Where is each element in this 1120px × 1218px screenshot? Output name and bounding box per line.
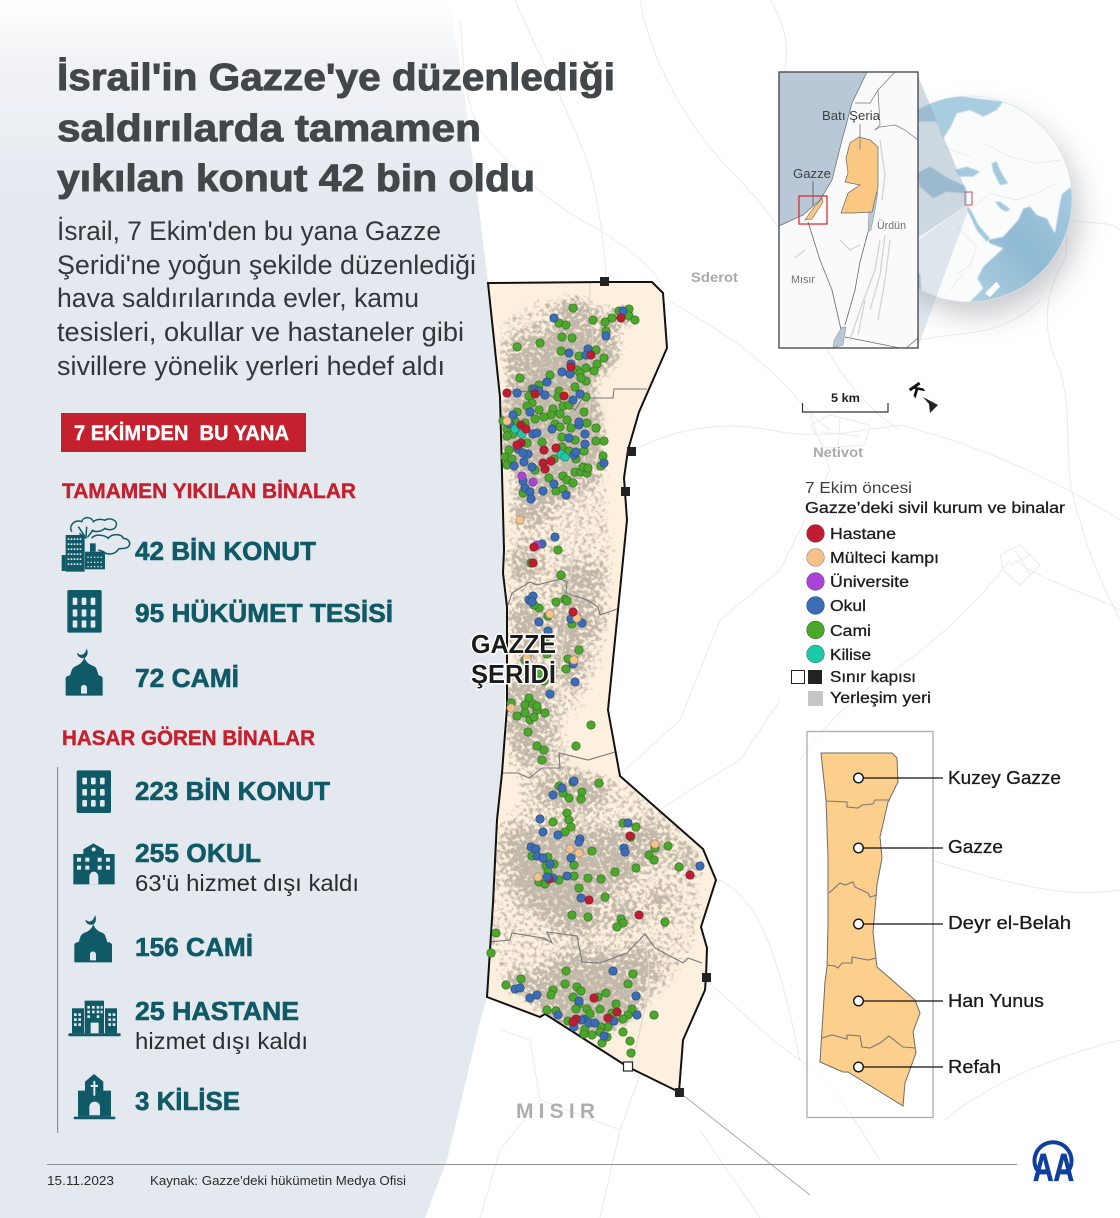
legend item: hospital: Hastane xyxy=(830,526,896,543)
heading: destroyed buildings: TAMAMEN YIKILAN BİNALAR xyxy=(62,480,356,503)
icon: school xyxy=(73,843,115,884)
stat: damaged mosques: 156 CAMİ xyxy=(135,932,253,962)
inset locator map: Gazze xyxy=(793,166,831,181)
footer source: Kaynak: Gazze'deki hükümetin Medya Ofisi xyxy=(150,1174,406,1188)
legend: Gazze’deki sivil kurum ve binalar xyxy=(805,500,1066,517)
region marker: Refah: Refah xyxy=(948,1057,1001,1077)
region marker: Gazze: Gazze xyxy=(948,837,1003,857)
stat: damaged hospitals: hizmet dışı kaldı xyxy=(135,1028,308,1054)
stat: damaged schools: 255 OKUL xyxy=(135,838,261,868)
stat: government buildings: 95 HÜKÜMET TESİSİ xyxy=(135,598,393,628)
inset locator map: Mısır xyxy=(791,274,815,286)
dots: hospitals xyxy=(503,314,694,1026)
map label: Misir: MISIR xyxy=(516,1100,595,1123)
footer date: 15.11.2023 xyxy=(47,1174,114,1188)
icon: mosque xyxy=(66,648,103,696)
stat: damaged housing: 223 BİN KONUT xyxy=(135,776,330,806)
map label: Gaza Strip: GAZZE xyxy=(471,629,556,659)
scale bar: 5 km xyxy=(831,391,860,405)
dot: extra school on top xyxy=(543,873,551,881)
legend xyxy=(792,480,1066,707)
legend item: church: Kilise xyxy=(830,647,871,664)
intro paragraph: sivillere yönelik yerleri hedef aldı xyxy=(57,351,445,381)
stat: mosques destroyed: 72 CAMİ xyxy=(135,663,239,693)
legend item: mosque xyxy=(807,621,871,640)
region marker: Refah xyxy=(854,1057,1001,1077)
legend item: border crossing: Sınır kapısı xyxy=(830,669,916,686)
map label: Netivot: Netivot xyxy=(813,444,863,460)
legend item: university xyxy=(807,573,909,591)
date banner xyxy=(61,413,306,452)
legend item: church xyxy=(807,645,871,664)
intro paragraph: hava saldırılarında evler, kamu xyxy=(57,283,419,313)
title: yıkılan konut 42 bin oldu xyxy=(57,158,535,200)
icon: damaged mosque xyxy=(74,915,112,962)
map: Gaza Strip territory xyxy=(470,282,716,1092)
intro paragraph xyxy=(57,215,476,381)
governorates locator map xyxy=(807,732,1071,1118)
icon: government building xyxy=(67,590,102,633)
north arrow xyxy=(905,379,938,413)
intro paragraph: Şeridi'ne yoğun şekilde düzenlediği xyxy=(57,250,476,280)
legend item: refugee camp: Mülteci kampı xyxy=(830,550,939,567)
dots: churches xyxy=(511,425,569,461)
title: saldırılarda tamamen xyxy=(57,108,481,150)
background street map xyxy=(460,0,1120,1218)
locator box on globe xyxy=(965,192,972,205)
dots: schools xyxy=(506,307,704,1040)
intro paragraph: İsrail, 7 Ekim'den bu yana Gazze xyxy=(57,215,441,246)
stat: damaged schools xyxy=(135,838,359,896)
legend item: settlement: Yerleşim yeri xyxy=(830,690,931,707)
legend item: school xyxy=(807,597,866,615)
icon: destroyed housing xyxy=(62,518,130,572)
legend item: hospital xyxy=(807,525,896,543)
legend item: school: Okul xyxy=(830,598,866,615)
map label: Sderot: Sderot xyxy=(691,269,738,285)
inset locator map: Ürdün xyxy=(877,220,906,232)
left panel background xyxy=(0,0,507,1218)
legend: 7 Ekim öncesi xyxy=(805,480,912,497)
icon: hospital xyxy=(68,1001,121,1036)
inset locator map: Batı Şeria xyxy=(822,108,881,123)
legend item: mosque: Cami xyxy=(830,623,871,640)
vertical rule xyxy=(57,767,58,1133)
title xyxy=(57,57,615,200)
region marker: Kuzey Gazze: Kuzey Gazze xyxy=(948,768,1061,788)
stat: damaged churches: 3 KİLİSE xyxy=(135,1086,240,1116)
dots: universities xyxy=(518,472,541,549)
logo: Anadolu Agency: AA xyxy=(1033,1147,1074,1190)
legend item: university: Üniversite xyxy=(830,573,909,591)
logo: Anadolu Agency xyxy=(1033,1142,1074,1190)
region marker: Deyr el-Belah: Deyr el-Belah xyxy=(948,913,1071,933)
north arrow: K xyxy=(905,379,928,401)
region marker: Kuzey Gazze xyxy=(854,768,1061,788)
region marker: Han Yunus: Han Yunus xyxy=(948,991,1044,1011)
icon: church xyxy=(74,1074,115,1119)
icon: apartment xyxy=(77,770,111,813)
heading: damaged buildings: HASAR GÖREN BİNALAR xyxy=(62,727,315,750)
settlements xyxy=(490,292,707,1038)
date banner: 7 EKİM'DEN BU YANA xyxy=(74,422,289,445)
legend item: refugee camp xyxy=(807,549,939,567)
stat: housing destroyed: 42 BİN KONUT xyxy=(135,536,316,566)
footer rule xyxy=(47,1164,1017,1165)
dots: mosques xyxy=(487,304,683,1057)
soft settlement tint xyxy=(507,335,632,1028)
zoom cone xyxy=(918,76,970,347)
intro paragraph: tesisleri, okullar ve hastaneler gibi xyxy=(57,317,464,347)
stat: damaged hospitals: 25 HASTANE xyxy=(135,996,299,1026)
title: İsrail'in Gazze'ye düzenlediği xyxy=(57,57,615,99)
map label: Gaza Strip xyxy=(471,629,556,689)
scale bar xyxy=(802,391,888,412)
region marker: Deyr el-Belah xyxy=(854,913,1071,933)
region marker: Han Yunus xyxy=(854,991,1044,1011)
globe xyxy=(918,96,1093,329)
map label: Gaza Strip: ŞERİDİ xyxy=(471,659,556,689)
region marker: Gazze xyxy=(854,837,1003,857)
dots: refugee camps xyxy=(503,389,659,881)
border crossings xyxy=(600,277,711,1097)
stat: damaged schools: 63'ü hizmet dışı kaldı xyxy=(135,870,359,896)
legend item: border crossing xyxy=(792,669,916,686)
inset locator map xyxy=(779,72,918,349)
stat: damaged hospitals xyxy=(135,996,308,1054)
